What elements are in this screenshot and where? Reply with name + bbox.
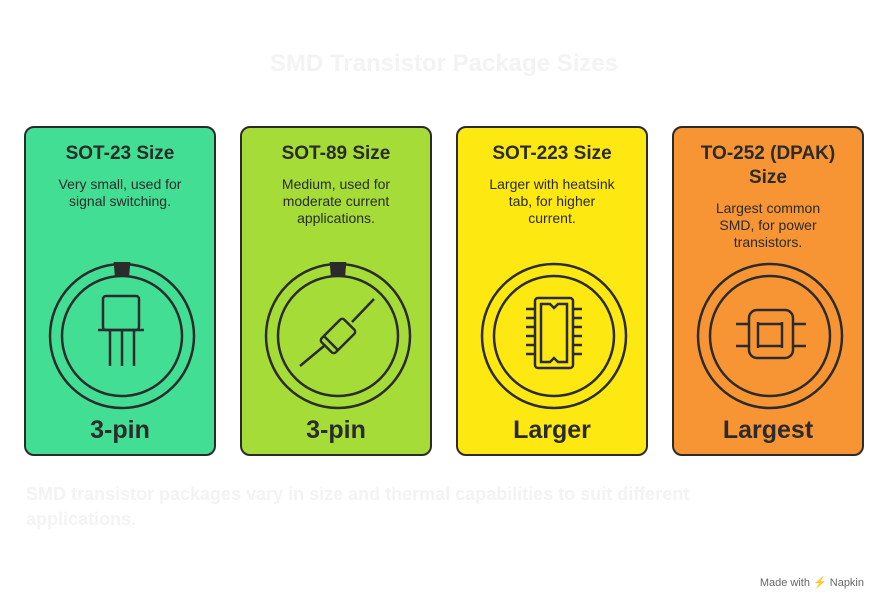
panel: SOT-223: Larger with heatsink tab, for higher current. (489, 176, 615, 226)
title: SMD Transistor Package Sizes (270, 50, 618, 77)
panel: SOT-23: SOT-23 Size (66, 143, 174, 164)
panel: TO-252: Largest common SMD, for power transistors. (716, 200, 820, 250)
panel: TO-252 (672, 126, 864, 456)
panel: TO-252: TO-252 (DPAK) Size (701, 143, 835, 188)
panel: SOT-23 (24, 126, 216, 456)
watermark: Made with ⚡ Napkin (760, 577, 864, 589)
icon: package (696, 262, 844, 410)
panel: SOT-89 (240, 126, 432, 456)
panel: SOT-23: Very small, used for signal switching. (59, 176, 181, 209)
label: 3-pin (306, 416, 366, 444)
bottom text: SMD transistor packages vary in size and thermal capabilities to suit different applications. (26, 484, 689, 529)
icon: chip (480, 262, 628, 410)
panel: SOT-223: SOT-223 Size (492, 143, 612, 164)
label: Larger (513, 416, 591, 444)
panel: SOT-223 (456, 126, 648, 456)
icon: transistor (48, 262, 196, 410)
icon: diode (264, 262, 412, 410)
panel: SOT-89: SOT-89 Size (282, 143, 390, 164)
label: Largest (723, 416, 813, 444)
panel: SOT-89: Medium, used for moderate current applications. (282, 176, 390, 226)
label: 3-pin (90, 416, 150, 444)
